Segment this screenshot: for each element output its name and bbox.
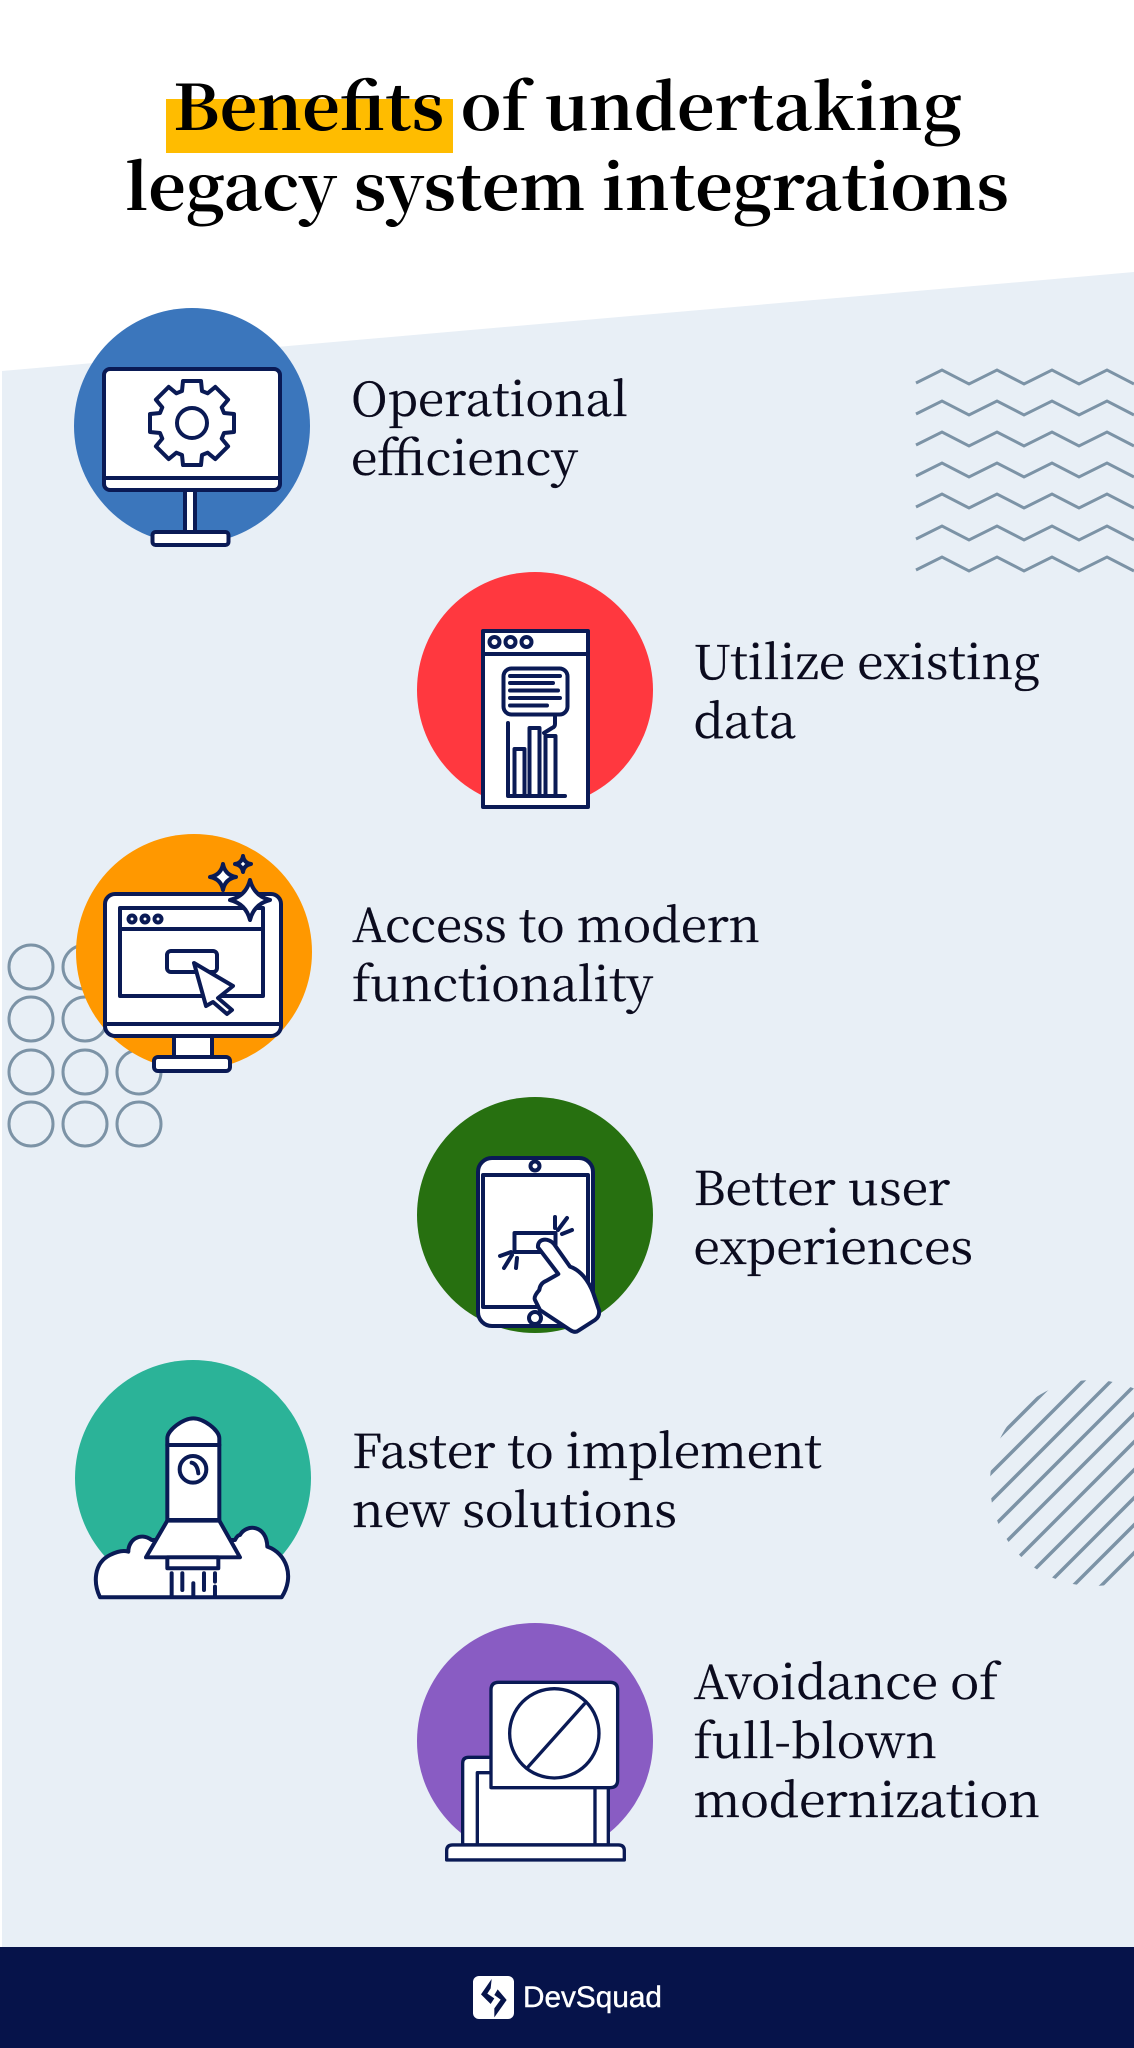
icon: tablet with hand: [417, 1097, 653, 1333]
title: [125, 58, 1009, 229]
item: avoidance of full-blown modernization: [417, 1623, 1040, 1860]
icon: window with chart: [417, 572, 653, 808]
pattern: circles grid: [9, 945, 161, 1146]
label: avoidance of full-blown modernization: modernization: [694, 1764, 1040, 1831]
icon: DevSquad logo: [473, 1976, 514, 2019]
item: faster to implement new solutions: [75, 1360, 822, 1597]
item: access to modern functionality: [76, 834, 760, 1071]
item: better user experiences: [417, 1097, 973, 1333]
label: operational efficiency: efficiency: [351, 422, 578, 489]
footer: [0, 1947, 1134, 2048]
title highlight: [166, 99, 453, 153]
label: access to modern functionality: Access to modern: [352, 889, 760, 956]
item: utilize existing data: [417, 572, 1040, 808]
title line 1: Benefits of undertaking: [173, 58, 962, 149]
pattern: diagonal stripes circle: [990, 1380, 1134, 1586]
label: avoidance of full-blown modernization: full-blown: [694, 1705, 937, 1772]
label: better user experiences: experiences: [694, 1211, 973, 1278]
logo wordmark: DevSquad: [523, 1981, 662, 2014]
label: access to modern functionality: functionality: [352, 948, 653, 1015]
label: faster to implement new solutions: new solutions: [352, 1474, 677, 1541]
label: faster to implement new solutions: Faster to implement: [352, 1415, 822, 1482]
label: utilize existing data: Utilize existing: [694, 626, 1040, 693]
pattern: zigzag lines: [916, 370, 1134, 571]
item: operational efficiency: [74, 308, 628, 545]
icon: laptop with blocked sign: [417, 1623, 653, 1860]
icon: rocket launching: [75, 1360, 311, 1597]
title line 2: legacy system integrations: [125, 138, 1009, 229]
label: avoidance of full-blown modernization: Avoidance of: [694, 1646, 1002, 1713]
icon: monitor with cursor and sparkles: [76, 834, 312, 1071]
icon: monitor with gear: [74, 308, 310, 545]
label: better user experiences: Better user: [694, 1152, 950, 1219]
label: operational efficiency: Operational: [351, 363, 628, 430]
label: utilize existing data: data: [694, 685, 796, 752]
